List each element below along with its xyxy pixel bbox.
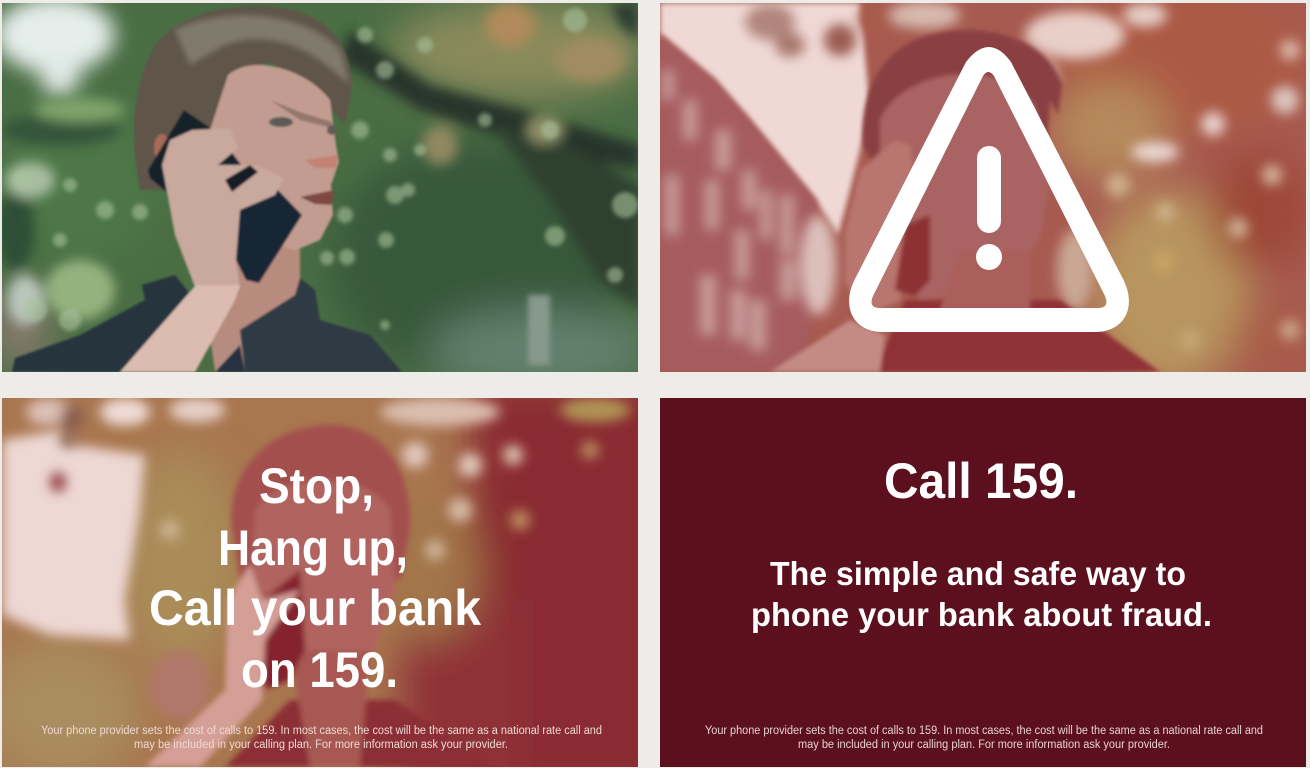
headline: Stop, bbox=[259, 458, 374, 514]
footnote: Your phone provider sets the cost of calls to 159. In most cases, the cost will be the same as a national rate call and bbox=[41, 725, 602, 737]
footnote bbox=[41, 725, 602, 751]
phone bbox=[895, 215, 930, 296]
hair bbox=[859, 28, 1064, 160]
phone strip between fingers bbox=[225, 165, 258, 192]
shirt bbox=[225, 700, 495, 767]
panel: warning triangle over tinted photo bbox=[660, 0, 1310, 390]
phone bbox=[262, 570, 305, 690]
face bbox=[210, 65, 339, 250]
hair bbox=[134, 6, 352, 190]
hair bbox=[231, 425, 410, 580]
subheading: phone your bank about fraud. bbox=[751, 596, 1212, 633]
footnote: may be included in your calling plan. For more information ask your provider. bbox=[798, 739, 1170, 751]
headline: Call your bank bbox=[149, 580, 481, 636]
face bbox=[250, 480, 395, 660]
subheading bbox=[751, 555, 1212, 633]
hand bbox=[845, 140, 915, 320]
sky patch bbox=[2, 430, 145, 640]
phone side bbox=[148, 110, 245, 195]
shirt bbox=[12, 275, 195, 372]
subheading: The simple and safe way to bbox=[770, 555, 1186, 592]
footnote: Your phone provider sets the cost of calls to 159. In most cases, the cost will be the same as a national rate call and bbox=[705, 725, 1263, 737]
footnote bbox=[705, 725, 1263, 751]
forearm bbox=[120, 285, 240, 372]
sky bbox=[660, 3, 870, 235]
building bbox=[660, 34, 816, 372]
neck bbox=[222, 245, 302, 342]
panel: call 159 bbox=[660, 398, 1306, 767]
foliage top bbox=[745, 1, 1300, 350]
hand bbox=[162, 128, 284, 295]
phone back bbox=[236, 188, 302, 283]
ear bbox=[154, 134, 170, 162]
headline bbox=[149, 458, 481, 698]
headline: Hang up, bbox=[218, 520, 408, 576]
icon: warning triangle bbox=[849, 47, 1129, 332]
footnote: may be included in your calling plan. For more information ask your provider. bbox=[134, 739, 508, 751]
hand and arm bbox=[145, 565, 300, 767]
heading: Call 159. bbox=[884, 453, 1078, 509]
panel: stop hang up call 159 bbox=[2, 398, 638, 767]
lamp post blur bbox=[528, 295, 550, 365]
face bbox=[880, 74, 1050, 300]
chest bbox=[875, 300, 1160, 372]
panel: man on phone in park bbox=[0, 0, 650, 390]
headline: on 159. bbox=[241, 642, 398, 698]
